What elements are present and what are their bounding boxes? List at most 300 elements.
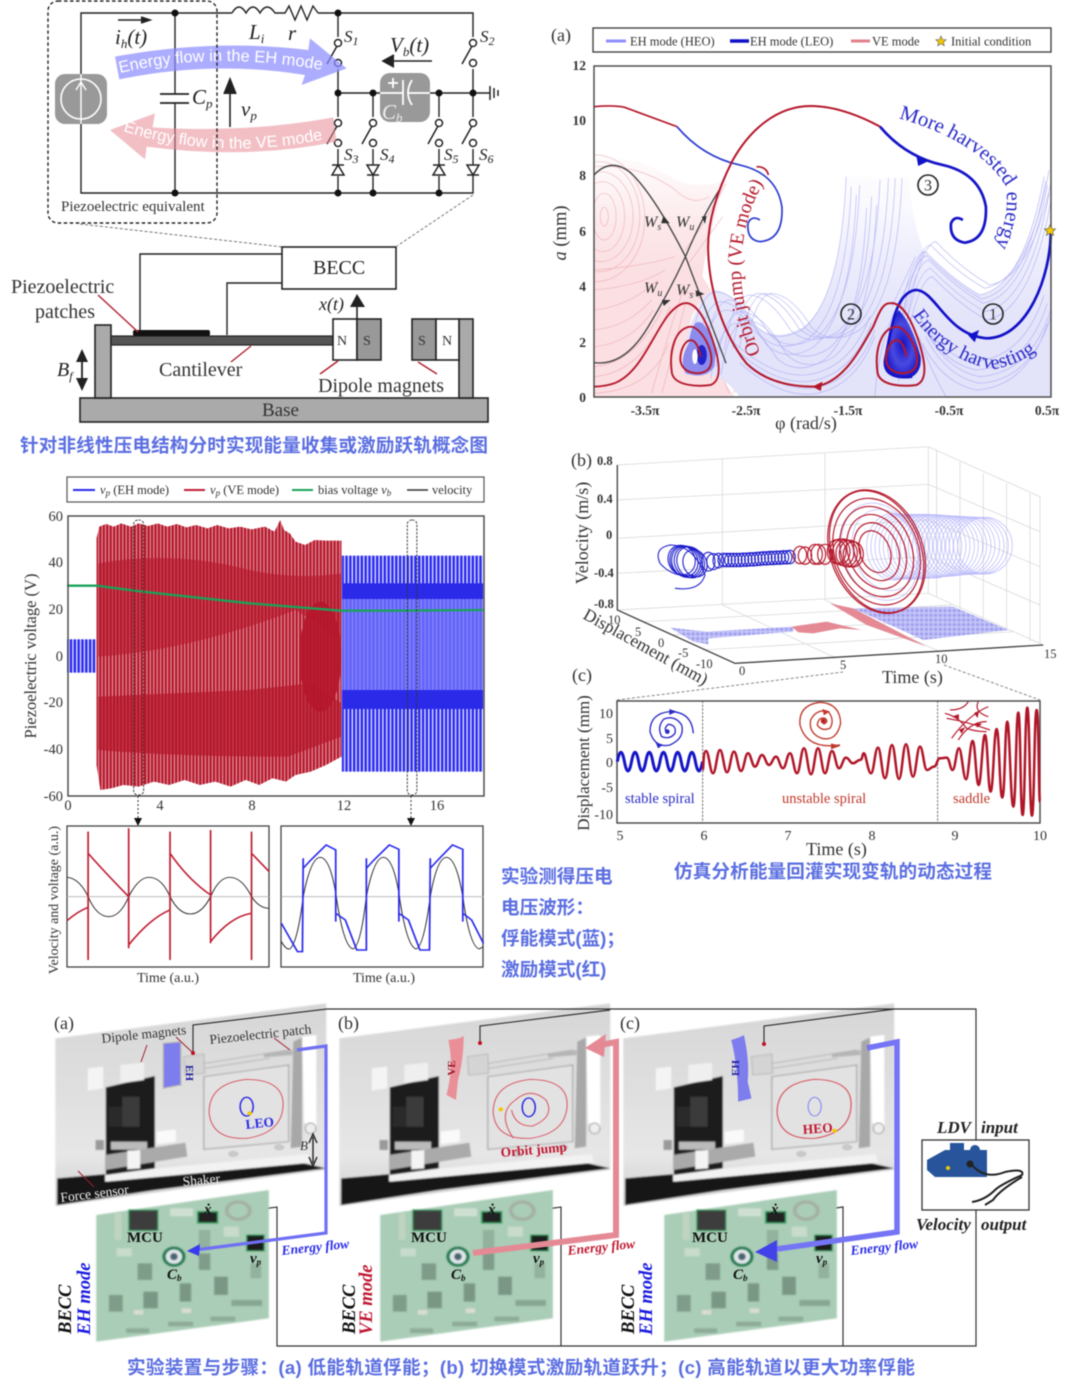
PCB (a) <box>96 1190 269 1342</box>
icon: unstable spiral <box>800 702 841 748</box>
legend: velocity <box>432 483 473 497</box>
manifold labels: u <box>657 288 662 299</box>
panel (a): phase portrait <box>551 25 1060 434</box>
panel label a: (a) <box>551 25 571 46</box>
displacement tick labels: 6 <box>700 829 708 844</box>
arrow x(t) <box>318 294 365 319</box>
left well center <box>697 345 707 365</box>
red coil <box>793 475 943 628</box>
red VE waveform envelope <box>97 520 341 790</box>
energy flow arrow EH <box>114 38 347 86</box>
mode indicator (a) <box>163 1042 181 1088</box>
arrow: energy flow a <box>187 1046 326 1256</box>
PCB labels: p <box>539 1257 545 1267</box>
axis ticks: 20 <box>48 602 63 618</box>
waveform <box>67 520 483 795</box>
axis ticks: 12 <box>337 798 351 814</box>
axes labels: 2 <box>579 335 586 350</box>
initial condition star <box>1044 225 1056 235</box>
circuit symbols: 4 <box>388 152 394 166</box>
capacitor Cb <box>380 73 430 125</box>
photo annotations a: EH <box>730 1060 742 1076</box>
legend <box>593 28 1051 52</box>
LDV labels: output <box>981 1215 1028 1234</box>
numbered markers <box>841 175 1003 324</box>
photo (b) <box>339 1003 610 1206</box>
inset: VE waveform <box>67 826 269 967</box>
axes labels <box>572 58 1060 418</box>
BECC box <box>282 247 396 289</box>
panel labels <box>54 1013 640 1034</box>
HEO light tube <box>828 492 1012 611</box>
arrow Bf <box>57 349 88 391</box>
LDV instrument <box>922 1140 1029 1210</box>
velocity ticks: 0.8 <box>597 454 613 468</box>
axis ticks: 4 <box>156 798 164 814</box>
switches S1 to S6 <box>327 40 476 146</box>
legend: p <box>215 488 221 498</box>
red stream region <box>594 157 735 397</box>
PCB labels: ẋ <box>203 1202 212 1218</box>
component labels: Base <box>262 400 299 421</box>
PCB labels: MCU <box>692 1230 728 1246</box>
photo (c) <box>623 1003 894 1206</box>
phase portrait curves <box>594 104 1053 397</box>
red spiral left <box>594 303 719 387</box>
PCB labels: MCU <box>127 1230 163 1246</box>
PCB labels: v <box>250 1251 257 1267</box>
displacement tick labels: 0 <box>606 756 613 771</box>
capacitor Cb: C <box>382 100 396 124</box>
BECC box: BECC <box>313 257 365 279</box>
region labels: unstable spiral <box>782 791 866 807</box>
capacitor Cb: b <box>396 110 403 125</box>
circuit symbols: h <box>121 36 127 51</box>
photo annotations a <box>60 1021 833 1205</box>
mode labels: BECC <box>56 1284 76 1335</box>
3D grid walls <box>617 447 1043 658</box>
HEO thick blue right <box>880 127 986 243</box>
circuit symbols <box>115 20 494 166</box>
small arrows <box>118 17 432 127</box>
displacement axis title: Displacement (mm) <box>580 604 712 689</box>
blue lower stripes <box>342 708 483 772</box>
circuit symbols: i <box>115 25 121 49</box>
caption: measured waveform: 电压波形： <box>501 897 594 918</box>
legend <box>67 477 484 502</box>
LDV labels: LDV <box>936 1118 973 1137</box>
blue upper stripes <box>342 556 483 584</box>
legend: v <box>210 483 221 498</box>
red main orbit <box>708 106 924 387</box>
red dense lower band <box>98 683 341 757</box>
moving magnet <box>333 319 381 360</box>
time axis title: Time (s) <box>806 839 867 860</box>
panel (b): 3D trajectory <box>617 447 1043 663</box>
displacement ticks: 5 <box>635 625 641 639</box>
blue streamlines <box>691 167 1054 397</box>
energy flow labels <box>280 1236 920 1258</box>
displacement tick labels: 10 <box>599 707 613 722</box>
x axis title phi: φ (rad/s) <box>775 413 837 434</box>
panel labels: (a) <box>54 1013 74 1034</box>
displacement tick labels: 8 <box>868 829 876 844</box>
displacement tick labels: -5 <box>601 781 613 796</box>
mode labels: VE mode <box>357 1265 377 1335</box>
panel: experimental setup <box>54 1003 1029 1346</box>
photo annotations a: Shaker <box>182 1171 221 1189</box>
PCB labels: b <box>177 1273 182 1283</box>
path label: more harvested energy: More harvested energy <box>898 105 1018 250</box>
photo annotations a: LEO <box>245 1114 275 1132</box>
arrow Bf: B <box>57 359 69 381</box>
manifold labels: s <box>657 222 661 233</box>
axes labels: 10 <box>572 113 586 128</box>
displacement ticks: 10 <box>608 613 620 627</box>
circuit symbols: 5 <box>452 152 458 166</box>
floor projection red <box>792 603 927 647</box>
PCB labels: MCU <box>411 1230 447 1246</box>
energy flow labels: Energy flow <box>566 1236 637 1258</box>
zoom window right <box>407 520 417 795</box>
velocity ticks: -0.4 <box>594 566 615 580</box>
axis ticks: 0 <box>56 649 63 665</box>
zoom arrows <box>134 796 415 826</box>
displacement tick labels: 9 <box>952 829 958 844</box>
PCB labels: p <box>822 1257 828 1267</box>
left post <box>95 325 111 398</box>
circuit wires <box>81 13 490 193</box>
photo annotations a: EH <box>183 1065 195 1081</box>
region labels: saddle <box>953 791 990 807</box>
legend: v <box>100 483 111 498</box>
mode indicator (b) <box>446 1035 464 1100</box>
red orbit left top <box>594 106 768 175</box>
circuit symbols: S <box>480 27 488 46</box>
axis ticks: -20 <box>44 695 63 711</box>
trace (c) <box>777 1079 851 1138</box>
PCB labels: b <box>743 1273 748 1283</box>
trace (a) <box>209 1079 283 1138</box>
LDV labels: input <box>981 1118 1019 1137</box>
orbit arrow red <box>812 382 822 391</box>
mode labels: EH mode <box>637 1263 657 1336</box>
velocity ticks: 0 <box>606 528 612 542</box>
panel (b) text <box>571 450 1056 689</box>
axes labels: 6 <box>579 224 586 239</box>
heading: concept diagram caption: 针对非线性压电结构分时实现能量收集或激励跃轨概念图 <box>20 435 488 456</box>
floor projection blue <box>670 627 793 644</box>
legend: p <box>105 488 111 498</box>
marker numbers: 1 <box>989 306 997 324</box>
arrow Bf: f <box>69 369 74 383</box>
left blue well <box>683 322 715 376</box>
circuit symbols: S <box>444 145 452 164</box>
photo annotations a: HEO <box>802 1120 833 1137</box>
axes labels: 4 <box>579 279 586 294</box>
component labels <box>11 276 444 421</box>
fixed magnet: S <box>418 334 426 349</box>
legend: EH mode (HEO) <box>630 34 715 48</box>
axes labels: -3.5π <box>631 403 660 418</box>
double arrow Bf photo: B <box>300 1138 308 1153</box>
circuit symbols: p <box>249 108 257 123</box>
circuit symbols: 3 <box>352 152 358 166</box>
displacement tick labels: 5 <box>606 732 613 747</box>
PCB labels: ẋ <box>487 1202 496 1218</box>
panel: cantilever structure diagram <box>11 195 488 422</box>
caption: simulation: 仿真分析能量回灌实现变轨的动态过程 <box>674 861 992 882</box>
PCB labels: b <box>461 1273 466 1283</box>
circuit symbols: (t) <box>127 25 147 49</box>
axes labels: 0 <box>579 390 586 405</box>
velocity ticks <box>594 454 615 611</box>
blue displacement wave <box>617 752 703 771</box>
displacement ticks <box>608 613 1056 678</box>
manifold labels: W <box>676 282 689 299</box>
path label: orbit jump: Orbit jump (VE mode) <box>727 179 765 356</box>
component labels: Piezoelectric <box>11 276 114 298</box>
arrow: energy flow c <box>755 1042 897 1262</box>
axes labels: -1.5π <box>834 403 863 418</box>
pointer lines <box>78 1037 290 1187</box>
time axis title: Time (s) <box>882 667 943 688</box>
photo annotations a: Force sensor <box>60 1182 130 1205</box>
axes labels: 8 <box>579 168 586 183</box>
velocity ticks: 0.4 <box>597 492 613 506</box>
label: piezoelectric equivalent: Piezoelectric equivalent <box>61 199 206 215</box>
PCB (c) <box>664 1190 837 1342</box>
base <box>80 398 488 422</box>
photo (a) <box>55 1003 326 1206</box>
component labels: patches <box>35 301 95 323</box>
left white core <box>692 349 698 364</box>
caption: measured waveform: 实验测得压电 <box>501 866 613 887</box>
mode labels: BECC <box>340 1284 360 1335</box>
blue dense band top <box>342 583 483 599</box>
fixed magnet: N <box>442 334 452 349</box>
panel labels: (c) <box>620 1013 640 1034</box>
legend: VE mode <box>872 34 920 48</box>
circuit symbols: S <box>344 145 352 164</box>
icon: stable spiral <box>650 710 693 747</box>
PCB labels: v <box>533 1251 540 1267</box>
inset axis labels <box>47 826 415 986</box>
legend: (VE mode) <box>220 483 279 497</box>
PCB labels: v <box>816 1251 823 1267</box>
displacement ticks: 10 <box>935 652 948 666</box>
axis ticks: 16 <box>430 798 444 814</box>
displacement ticks: 0 <box>739 664 745 678</box>
legend: (EH mode) <box>110 483 169 497</box>
capacitor Cp <box>160 94 189 103</box>
circuit symbols: p <box>205 96 213 111</box>
PCB labels: ẋ <box>770 1202 779 1218</box>
axes labels: -0.5π <box>935 403 964 418</box>
icon: saddle <box>945 702 990 740</box>
heading: experimental steps caption: 实验装置与步骤：(a) 低能轨道俘能；(b) 切换模式激励轨道跃升；(c) 高能轨道以更大功率俘能 <box>127 1357 915 1378</box>
circuit symbols: 6 <box>488 152 494 166</box>
energy flow arrow VE <box>110 113 337 160</box>
displacement ticks: 0 <box>658 636 664 650</box>
manifold labels: W <box>644 280 657 297</box>
displacement ticks: 15 <box>1044 647 1056 661</box>
piezoelectric equivalent dashed box <box>48 1 217 223</box>
manifold labels: s <box>689 290 693 301</box>
panel labels: (b) <box>338 1013 359 1034</box>
caption: measured waveform: 激励模式(红) <box>501 959 606 980</box>
cantilever beam <box>111 336 333 345</box>
3D axes <box>617 465 1043 663</box>
y axis title a: a (mm) <box>551 206 571 260</box>
legend: b <box>387 488 392 498</box>
inductor and resistor <box>232 6 318 20</box>
axis ticks: -60 <box>44 789 63 805</box>
right post <box>459 319 473 398</box>
region labels <box>625 791 990 807</box>
circuit symbols: i <box>261 31 265 46</box>
PCB (b) <box>380 1190 553 1342</box>
circuit symbols: 1 <box>352 34 358 48</box>
region labels: stable spiral <box>625 791 695 807</box>
HEO thin blue left <box>677 127 782 242</box>
red displacement wave <box>703 708 1040 816</box>
manifold labels: u <box>689 222 694 233</box>
axes labels: 0.5π <box>1035 403 1060 418</box>
panel: experimental voltage time series <box>21 477 484 986</box>
fixed magnet <box>412 319 459 360</box>
bias voltage line <box>67 586 483 611</box>
displacement axis title: Displacement (mm) <box>574 695 593 831</box>
floor projection blue right <box>853 607 1008 640</box>
circuit symbols: V <box>390 33 403 57</box>
double arrow Bf photo <box>300 1134 317 1166</box>
displacement ticks: 5 <box>840 658 846 672</box>
displacement tick labels: -10 <box>594 808 613 823</box>
zoom window left <box>134 520 144 795</box>
red dense upper band <box>98 558 341 657</box>
right blue well <box>885 310 921 378</box>
energy flow arrow EH: Energy flow in the EH mode <box>118 48 322 74</box>
caption: measured waveform <box>501 866 625 980</box>
LDV labels: Velocity <box>916 1215 971 1234</box>
path label: energy harvesting: Energy harvesting <box>912 308 1038 370</box>
plot frame <box>617 701 1040 823</box>
legend: EH mode (LEO) <box>750 34 833 48</box>
blue LEO coil <box>658 541 795 589</box>
photo annotations a: Orbit jump <box>500 1139 567 1160</box>
circuit symbols: b <box>403 44 410 59</box>
component labels: Cantilever <box>159 359 243 381</box>
velocity axis title: Velocity (m/s) <box>572 482 593 584</box>
circuit symbols: L <box>249 20 261 44</box>
circuit symbols: S <box>344 27 352 46</box>
plot frame <box>594 66 1051 397</box>
LEO path thick <box>885 231 1051 377</box>
label c: (c) <box>572 665 592 686</box>
PCB labels <box>127 1202 828 1283</box>
axis ticks: 0 <box>64 798 72 814</box>
legend: Initial condition <box>951 34 1032 48</box>
initial blue EH waveform <box>67 639 96 673</box>
mode labels <box>56 1263 657 1336</box>
displacement tick labels: 5 <box>616 829 624 844</box>
inset axis labels: Time (a.u.) <box>137 971 199 986</box>
blue stream region <box>686 215 1050 396</box>
caption: measured waveform: 俘能模式(蓝)； <box>501 928 625 949</box>
velocity ticks: -0.8 <box>594 597 614 611</box>
current source <box>55 74 107 124</box>
manifold labels <box>644 214 694 301</box>
blue mid solid <box>342 598 483 690</box>
axis ticks: 40 <box>48 555 63 571</box>
axes labels: -2.5π <box>732 403 761 418</box>
inset axis labels: Velocity and voltage (a.u.) <box>47 826 62 974</box>
label b: (b) <box>571 450 592 471</box>
diodes <box>332 165 479 175</box>
LEO arrow head <box>916 155 979 342</box>
marker numbers: 2 <box>847 306 855 324</box>
PCB labels: C <box>733 1267 743 1283</box>
trace (b) <box>493 1079 567 1138</box>
photo annotations a: VE <box>446 1060 458 1076</box>
red streamlines <box>594 154 736 394</box>
displacement tick labels: 10 <box>1033 829 1047 844</box>
inset axis labels: Time (a.u.) <box>353 971 415 986</box>
PCB labels: p <box>256 1257 262 1267</box>
signal wires <box>193 1009 976 1346</box>
arrow x(t): x(t) <box>318 294 344 315</box>
blue dense band bottom <box>342 690 483 709</box>
arrow: energy flow b <box>473 1034 616 1253</box>
circuit symbols: v <box>241 97 250 121</box>
PCB labels: C <box>167 1267 177 1283</box>
legend: bias voltage v <box>318 483 387 497</box>
circuit symbols: S <box>380 145 388 164</box>
photo annotations a: Dipole magnets <box>101 1022 187 1046</box>
axis ticks: 60 <box>48 509 63 525</box>
red pointer lines <box>98 295 437 374</box>
moving magnet: S <box>363 334 371 349</box>
displacement tick labels: 7 <box>784 829 792 844</box>
axis ticks: -40 <box>44 742 63 758</box>
PCB labels: C <box>451 1267 461 1283</box>
manifold labels: W <box>644 214 657 231</box>
axis title voltage: Piezoelectric voltage (V) <box>21 574 40 738</box>
marker numbers <box>847 178 997 324</box>
red dark cluster <box>299 602 341 712</box>
manifold labels: W <box>676 214 689 231</box>
energy flow labels: Energy flow <box>280 1236 351 1258</box>
displacement ticks: -10 <box>696 657 713 671</box>
panel: BECC circuit schematic <box>46 0 500 225</box>
circuit symbols: (t) <box>409 33 429 57</box>
moving magnet: N <box>337 334 347 349</box>
energy flow arrow VE: Energy flow in the VE mode <box>124 122 322 149</box>
circuit symbols: S <box>479 145 488 164</box>
axis ticks <box>44 509 444 814</box>
inset: EH waveform <box>281 826 483 967</box>
wire dots <box>191 1041 766 1055</box>
piezoelectric patch <box>133 330 210 336</box>
junction dots <box>172 10 476 196</box>
separatrix arrowheads <box>661 216 706 306</box>
panel (c): displacement time series <box>572 665 1047 860</box>
displacement ticks: -5 <box>678 646 688 660</box>
photo annotations a: Piezoelectric patch <box>209 1021 312 1047</box>
mode labels: EH mode <box>75 1263 95 1336</box>
ground symbol <box>490 86 498 100</box>
